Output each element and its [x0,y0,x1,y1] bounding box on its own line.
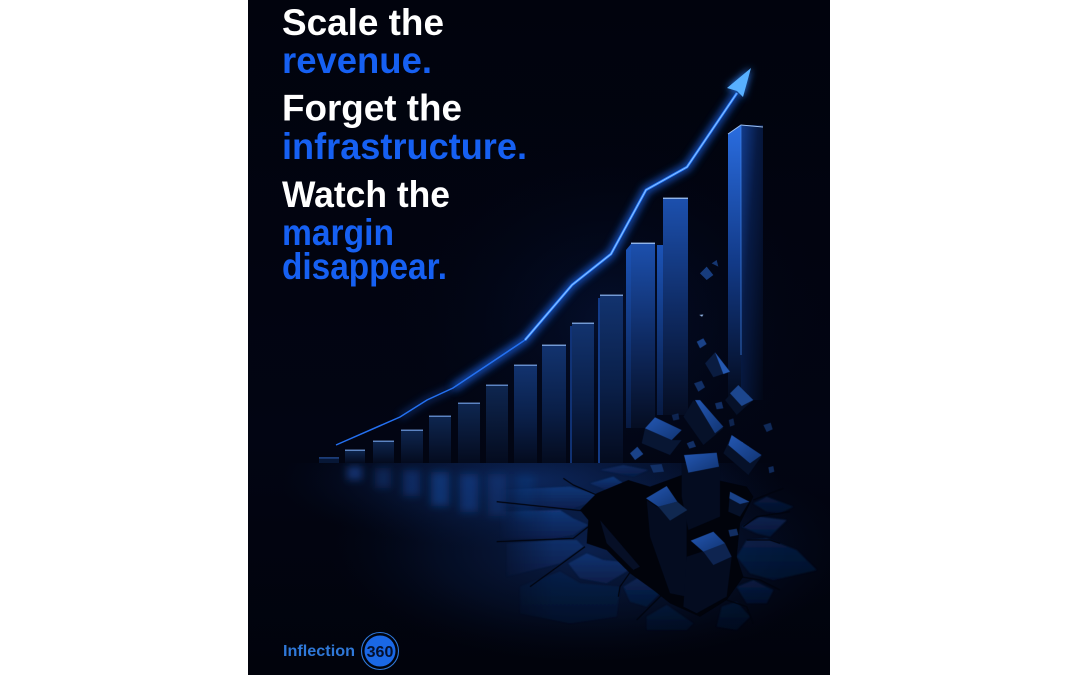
icon: arrow head [727,68,751,97]
logo: Inflection 360 [283,632,398,670]
headline: Watch the margin disappear: Watch the [282,174,450,215]
debris column shadows [647,500,687,597]
logo: Inflection 360: Inflection [283,643,355,660]
block 7 [725,385,753,415]
small debris fragments [630,260,774,537]
block 3 [723,435,762,475]
block 4 [684,453,719,473]
panel: dark poster background [248,0,850,675]
cracked floor slabs [500,465,817,630]
hole [580,473,753,617]
headline: Forget the infrastructure: Forget the [282,88,462,128]
block 2 [683,400,723,445]
cracks [497,478,790,623]
crater: cracked floor with collapsing blocks [497,260,817,630]
block 9 [728,492,749,517]
headline: Watch the margin disappear: disappear. [282,246,447,287]
block 8 [705,352,730,377]
headline: Scale the revenue [282,2,444,81]
logo: Inflection 360: 360 [367,644,393,661]
line chart: glowing growth arrow [336,68,751,445]
headline: Forget the infrastructure: infrastructure. [282,126,527,167]
headline: Forget the infrastructure [282,88,527,167]
headline: Watch the margin disappear: margin [282,212,394,253]
floor reflections of bars [347,466,534,518]
block 1 [642,417,682,455]
block 6 [691,532,732,565]
headline: Scale the revenue: Scale the [282,2,444,43]
headline: Scale the revenue: revenue. [282,40,432,81]
bar chart: rising revenue bars [319,125,763,518]
headline: Watch the margin disappear [282,174,450,287]
block 5 [646,486,687,521]
